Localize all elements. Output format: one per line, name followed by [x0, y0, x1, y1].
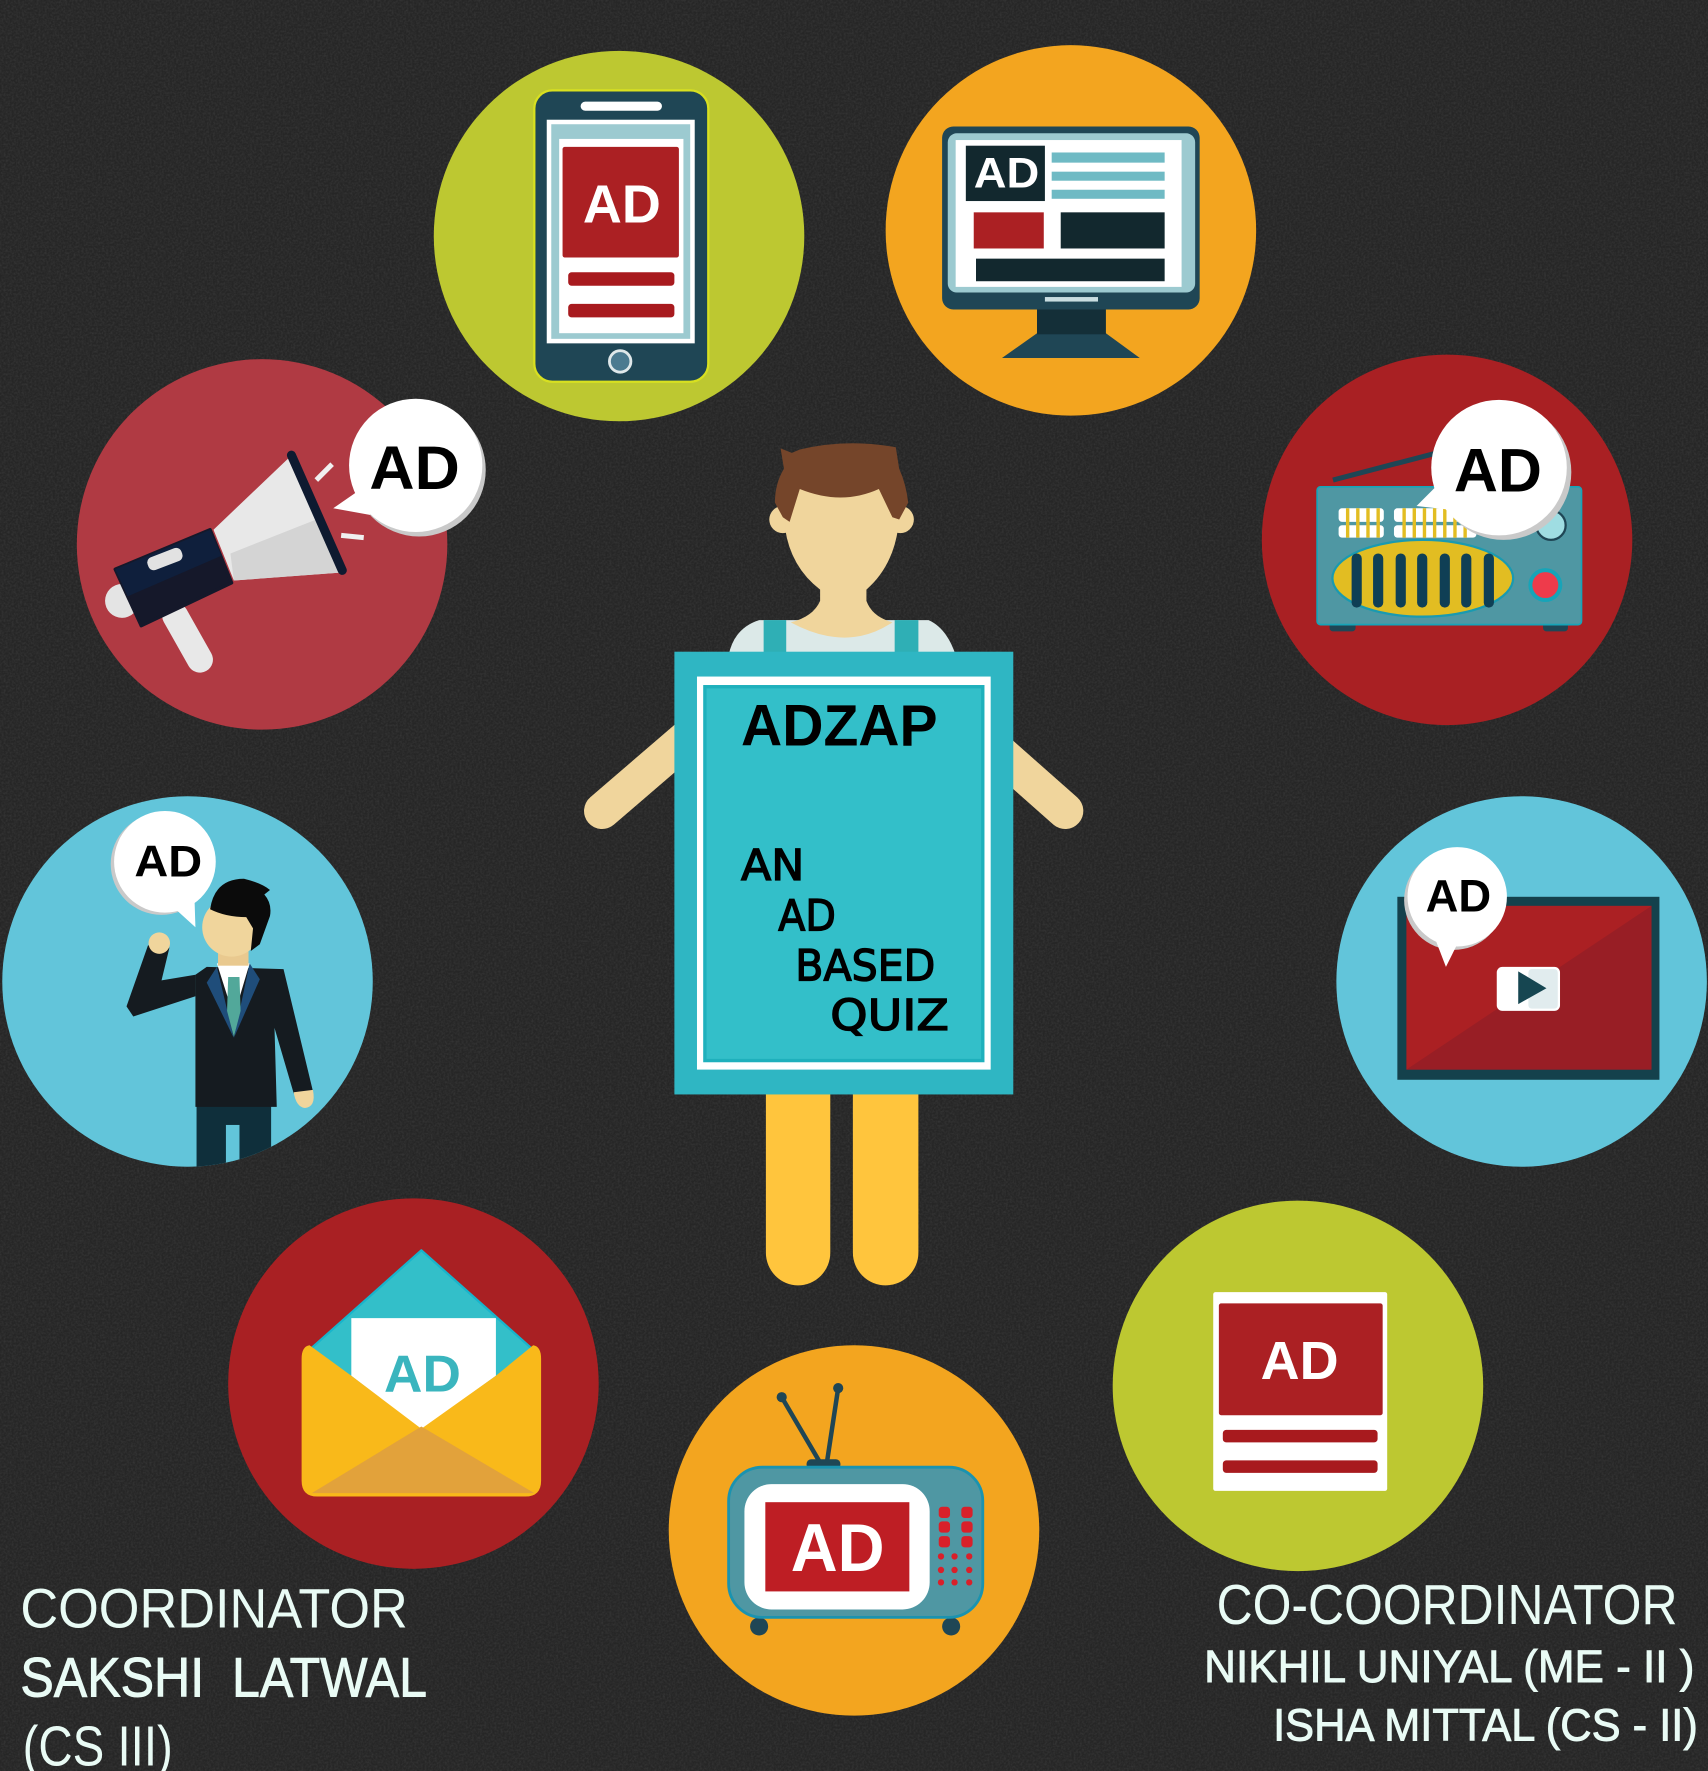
circle: green phone background — [434, 51, 804, 421]
circle: blue video background — [1336, 796, 1707, 1167]
title: ADZAP: ADZAP — [741, 693, 938, 758]
icon: television — [729, 1383, 983, 1635]
text block: coordinator: SAKSHI LATWAL — [20, 1646, 427, 1708]
panel: television ad — [669, 1345, 1039, 1716]
callout: video AD speech bubble — [1404, 847, 1507, 967]
text block: coordinator: COORDINATOR — [20, 1578, 408, 1640]
circle: red radio background — [1262, 355, 1632, 725]
panel: radio ad — [1262, 355, 1632, 725]
panel: megaphone ad — [77, 359, 486, 730]
subtitle: an ad based quiz — [741, 841, 949, 1041]
icon: newspaper ad — [1213, 1292, 1387, 1491]
legs — [766, 1084, 918, 1285]
callout: video AD speech bubble: AD — [1426, 870, 1491, 921]
callout: megaphone AD speech bubble — [333, 399, 486, 536]
text block: co-coordinators: ISHA MITTAL (CS - II) — [1273, 1700, 1698, 1751]
icon: smartphone: AD — [583, 175, 661, 235]
icon: megaphone — [105, 455, 364, 660]
icon: television: AD — [791, 1511, 884, 1586]
callout: businessman AD speech bubble — [111, 811, 216, 927]
circle: orange monitor background — [886, 45, 1256, 416]
callout: radio AD speech bubble — [1417, 400, 1571, 540]
circle: blue businessman background — [2, 796, 373, 1167]
panel: email ad — [228, 1198, 599, 1569]
circle: orange TV background — [669, 1345, 1039, 1716]
icon: radio — [1317, 453, 1581, 631]
panel: word of mouth businessman — [2, 796, 373, 1175]
subtitle: an ad based quiz: AD — [778, 892, 836, 942]
icon: smartphone — [534, 90, 708, 382]
sandwich board — [674, 652, 1013, 1094]
panel: desktop monitor ad — [886, 45, 1256, 416]
icon: desktop monitor — [942, 126, 1200, 358]
shirt and straps — [729, 620, 956, 655]
text block: coordinator — [20, 1578, 427, 1771]
subtitle: an ad based quiz: QUIZ — [830, 991, 949, 1041]
panel: mobile phone ad — [434, 51, 804, 421]
callout: radio AD speech bubble: AD — [1454, 436, 1542, 504]
panel: print ad document — [1113, 1201, 1483, 1571]
icon: businessman — [127, 879, 314, 1175]
circle: green document background — [1113, 1201, 1483, 1571]
text block: co-coordinators — [1204, 1573, 1698, 1751]
subtitle: an ad based quiz: AN — [741, 841, 804, 891]
icon: video player — [1397, 897, 1659, 1080]
subtitle: an ad based quiz: BASED — [795, 941, 935, 991]
callout: businessman AD speech bubble: AD — [134, 837, 202, 886]
icon: envelope: AD — [384, 1346, 461, 1403]
icon: desktop monitor: AD — [974, 149, 1039, 197]
icon: envelope — [302, 1250, 541, 1497]
circle: red mail background — [228, 1198, 599, 1569]
central figure: sandwich board man — [602, 443, 1065, 1285]
circle: red megaphone background — [77, 359, 447, 730]
callout: megaphone AD speech bubble: AD — [369, 434, 460, 502]
text block: co-coordinators: NIKHIL UNIYAL (ME - II ) — [1204, 1641, 1694, 1692]
arms — [602, 734, 1065, 811]
icon: newspaper ad: AD — [1261, 1331, 1339, 1391]
panel: video ad — [1336, 796, 1707, 1167]
head and neck — [769, 443, 914, 638]
